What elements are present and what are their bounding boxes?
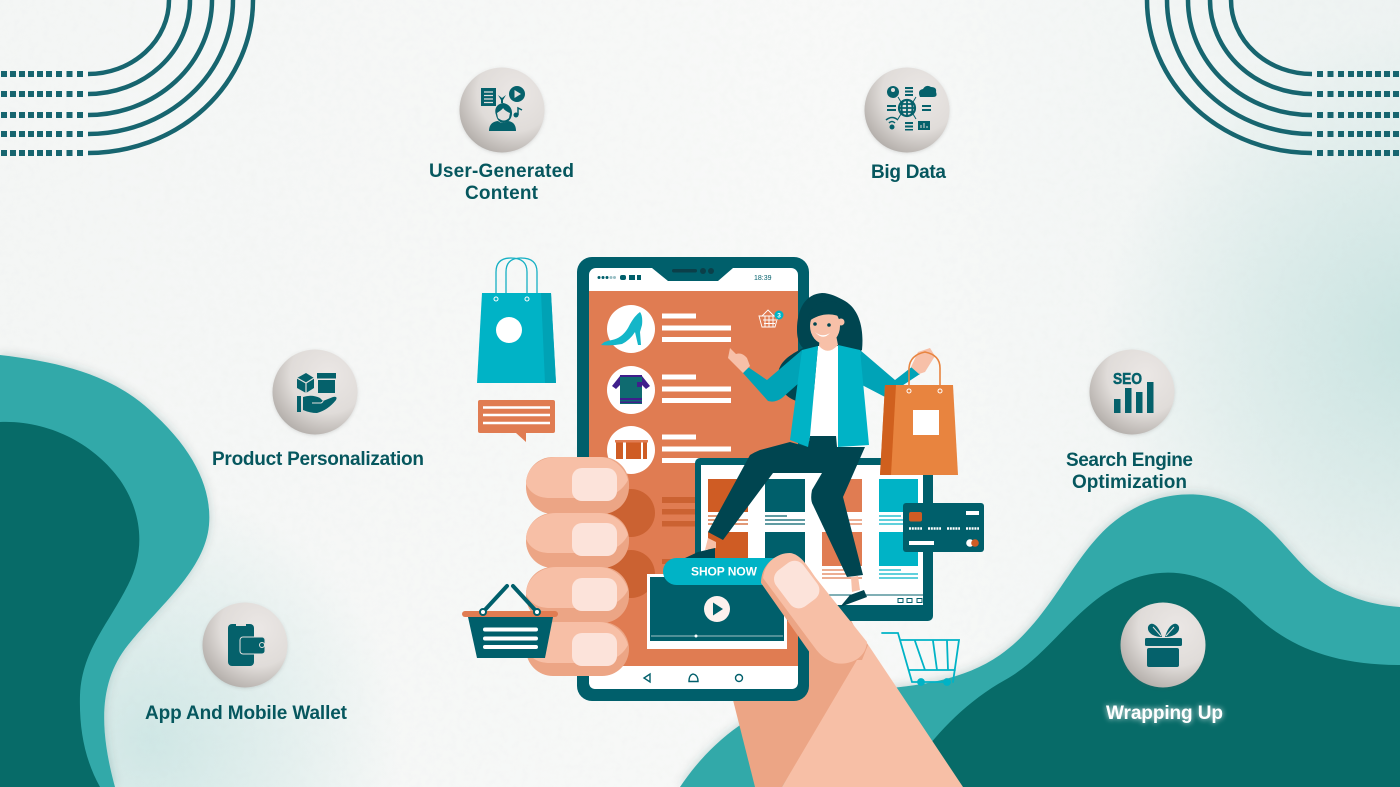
credit card bbox=[903, 503, 984, 552]
list item: t-shirt bbox=[607, 366, 655, 414]
list item shadows bbox=[607, 489, 702, 598]
icon: content creator bbox=[481, 86, 525, 131]
label: search engine optimization: Search Engine bbox=[1066, 450, 1193, 471]
teal shopping bag bbox=[477, 258, 556, 383]
product monitor bbox=[695, 458, 933, 621]
label: big data: Big Data bbox=[871, 162, 946, 183]
icon: phone wallet bbox=[228, 624, 265, 666]
node: product personalization bbox=[272, 350, 358, 434]
icon: seo bars: SEO bbox=[1113, 371, 1142, 388]
node: seo bbox=[1090, 350, 1174, 434]
fingers bbox=[526, 457, 629, 676]
left arm bbox=[743, 350, 802, 402]
list item: shoe bbox=[601, 305, 655, 353]
right wave blob bbox=[680, 494, 1400, 787]
shopping cart bbox=[882, 633, 959, 685]
node: user-generated content bbox=[460, 68, 544, 152]
node: wrapping up bbox=[1120, 602, 1206, 688]
phone bbox=[577, 257, 809, 701]
label: wrapping up: Wrapping Up bbox=[1106, 703, 1223, 724]
top-right arcs bbox=[1147, 0, 1399, 153]
list item: boxes bbox=[607, 426, 655, 474]
icon: gift box bbox=[1145, 624, 1182, 667]
left leg and hips bbox=[708, 436, 865, 577]
list text lines 1 bbox=[662, 314, 731, 342]
label: user-generated content bbox=[429, 161, 574, 204]
phone status bar: 18:39 bbox=[754, 275, 772, 282]
node: app and mobile wallet bbox=[202, 602, 288, 688]
label: user-generated content: User-Generated bbox=[429, 161, 574, 182]
icon: hand with boxes bbox=[297, 373, 337, 413]
list text lines 3 bbox=[662, 434, 731, 463]
shop basket badge bbox=[759, 310, 784, 327]
label: search engine optimization bbox=[1066, 450, 1193, 493]
top-left arcs bbox=[1, 0, 253, 153]
wrist bbox=[782, 643, 963, 787]
node: big data bbox=[864, 68, 950, 152]
list text lines 2 bbox=[662, 374, 731, 403]
label: search engine optimization: Optimization bbox=[1072, 472, 1187, 493]
label: product personalization: Product Personalization bbox=[212, 449, 424, 470]
shopping bag held bbox=[880, 352, 958, 475]
thumb bbox=[761, 553, 868, 664]
hands bbox=[728, 348, 935, 374]
hand behind phone bbox=[733, 600, 867, 787]
phone nav buttons bbox=[644, 674, 742, 682]
video player bbox=[647, 574, 787, 649]
left wave blob bbox=[0, 355, 209, 787]
neck and face bbox=[819, 335, 838, 351]
hair back bbox=[778, 293, 862, 402]
shop now button: SHOP NOW bbox=[691, 564, 758, 578]
jacket and shirt bbox=[810, 346, 838, 436]
phone status bar bbox=[598, 275, 772, 282]
right arm bbox=[860, 350, 920, 397]
label: app and mobile wallet: App And Mobile Wallet bbox=[145, 703, 348, 724]
shop basket badge: 3 bbox=[777, 312, 781, 320]
basket bbox=[462, 586, 558, 658]
shoes bbox=[705, 538, 860, 592]
shop now button bbox=[663, 558, 788, 585]
woman bbox=[685, 293, 935, 607]
speech bubble bbox=[478, 400, 555, 442]
label: user-generated content: Content bbox=[465, 183, 539, 204]
icon: data network bbox=[886, 86, 937, 130]
